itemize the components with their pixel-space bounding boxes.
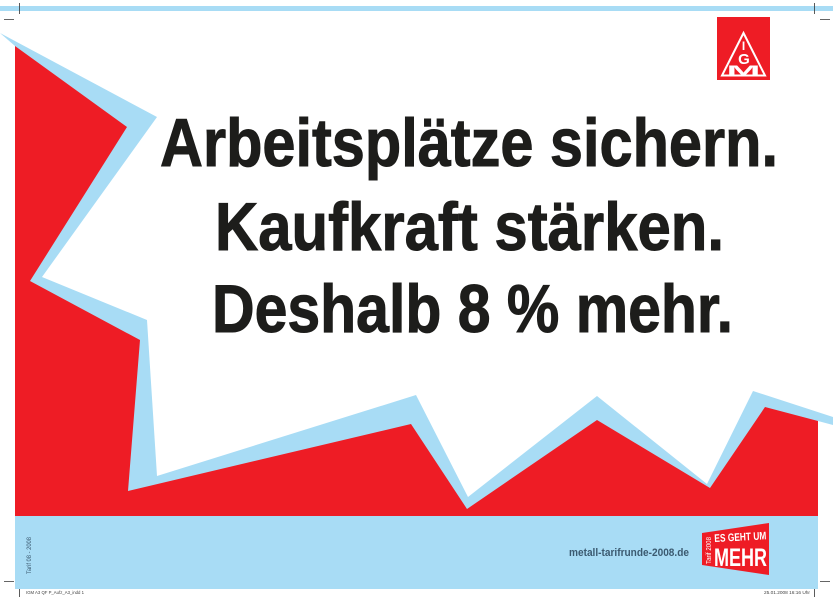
headline line 2: Kaufkraft stärken. bbox=[215, 189, 724, 265]
badge big word: MEHR bbox=[714, 544, 767, 572]
rotated small code: Tarif 08 - 2008 bbox=[27, 536, 33, 574]
letter I: I bbox=[742, 39, 745, 53]
letter G: G bbox=[738, 51, 750, 68]
campaign badge bbox=[702, 523, 769, 575]
print note right: 25.01.2008 16:16 Uhr bbox=[764, 590, 811, 595]
badge side text: Tarif 2008 bbox=[704, 537, 713, 564]
print note left: IGM A3 QF P_Aufz_A3_indd 1 bbox=[26, 590, 84, 595]
website url: metall-tarifrunde-2008.de bbox=[569, 547, 689, 559]
headline line 3: Deshalb 8 % mehr. bbox=[212, 271, 733, 347]
IG Metall logo bbox=[717, 17, 770, 80]
logo letters bbox=[726, 39, 760, 78]
badge slogan: ES GEHT UM bbox=[714, 530, 767, 545]
top blue stripe bbox=[0, 6, 833, 11]
headline bbox=[160, 105, 778, 347]
letter M: M bbox=[726, 62, 760, 78]
bottom blue band bbox=[15, 516, 818, 589]
red jagged chart shape bbox=[15, 46, 818, 516]
logo triangle bbox=[722, 33, 765, 76]
